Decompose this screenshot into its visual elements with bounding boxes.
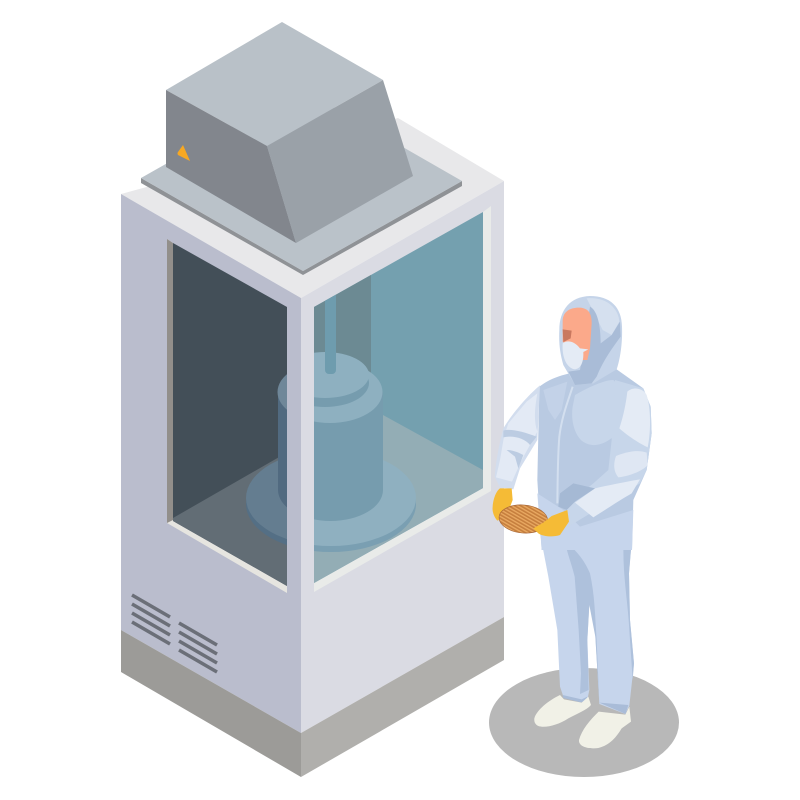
right window interior with pedestal bbox=[314, 212, 483, 583]
legs and shoes bbox=[534, 533, 634, 748]
right leg bbox=[565, 533, 634, 714]
right leg cuff shading bbox=[599, 703, 628, 714]
hood highlight bbox=[587, 298, 619, 335]
cabinet left face bbox=[121, 194, 301, 733]
right sleeve highlight upper bbox=[619, 388, 650, 447]
left window frame bbox=[167, 239, 287, 593]
wafer bbox=[498, 503, 549, 535]
hood bbox=[559, 296, 622, 385]
face shadow bbox=[563, 329, 572, 342]
floor shadow disc bbox=[489, 668, 679, 777]
ventilation grille left bbox=[132, 595, 170, 644]
left sleeve folds bbox=[503, 430, 537, 468]
left sleeve bbox=[495, 385, 540, 489]
cabinet base plinth left bbox=[121, 630, 301, 777]
face bbox=[563, 308, 592, 360]
torso bbox=[537, 369, 652, 550]
housing top face bbox=[166, 22, 383, 146]
left leg bbox=[540, 533, 589, 702]
face mask bbox=[563, 341, 588, 369]
technician in cleanroom suit bbox=[493, 296, 652, 748]
right sleeve bbox=[565, 380, 652, 527]
right sleeve highlight middle bbox=[614, 451, 648, 477]
top plate bbox=[141, 88, 462, 271]
left window jamb bbox=[167, 239, 173, 523]
outer leg shading bbox=[623, 533, 634, 680]
torso lower folds bbox=[558, 483, 595, 510]
cabinet right face bbox=[301, 181, 504, 733]
left leg cuff shading bbox=[563, 695, 587, 702]
right window frame bbox=[314, 206, 491, 592]
top plate edge bbox=[141, 178, 462, 275]
right sleeve highlight lower bbox=[575, 479, 640, 517]
zipper bbox=[557, 387, 573, 503]
right glove bbox=[533, 510, 569, 536]
illustration: cleanroom machine and technician bbox=[121, 22, 679, 777]
left shoe bbox=[534, 695, 591, 727]
housing left face bbox=[166, 90, 296, 243]
cabinet top surface bbox=[121, 118, 504, 298]
chest highlight bbox=[572, 380, 623, 445]
hip highlight bbox=[537, 493, 633, 550]
ventilation grille right bbox=[179, 623, 217, 672]
left window interior bbox=[173, 243, 287, 586]
left glove bbox=[493, 488, 513, 521]
right shoe bbox=[579, 707, 631, 748]
cabinet base plinth right bbox=[301, 617, 504, 777]
housing right face bbox=[267, 80, 413, 243]
machine cabinet bbox=[121, 22, 504, 777]
left sleeve highlight bbox=[496, 393, 537, 482]
upper body bbox=[493, 296, 652, 550]
icon: warning triangle bbox=[178, 145, 190, 161]
leg inner shading bbox=[563, 533, 599, 703]
hood shading bbox=[568, 307, 621, 385]
collar folds highlight bbox=[543, 382, 567, 420]
